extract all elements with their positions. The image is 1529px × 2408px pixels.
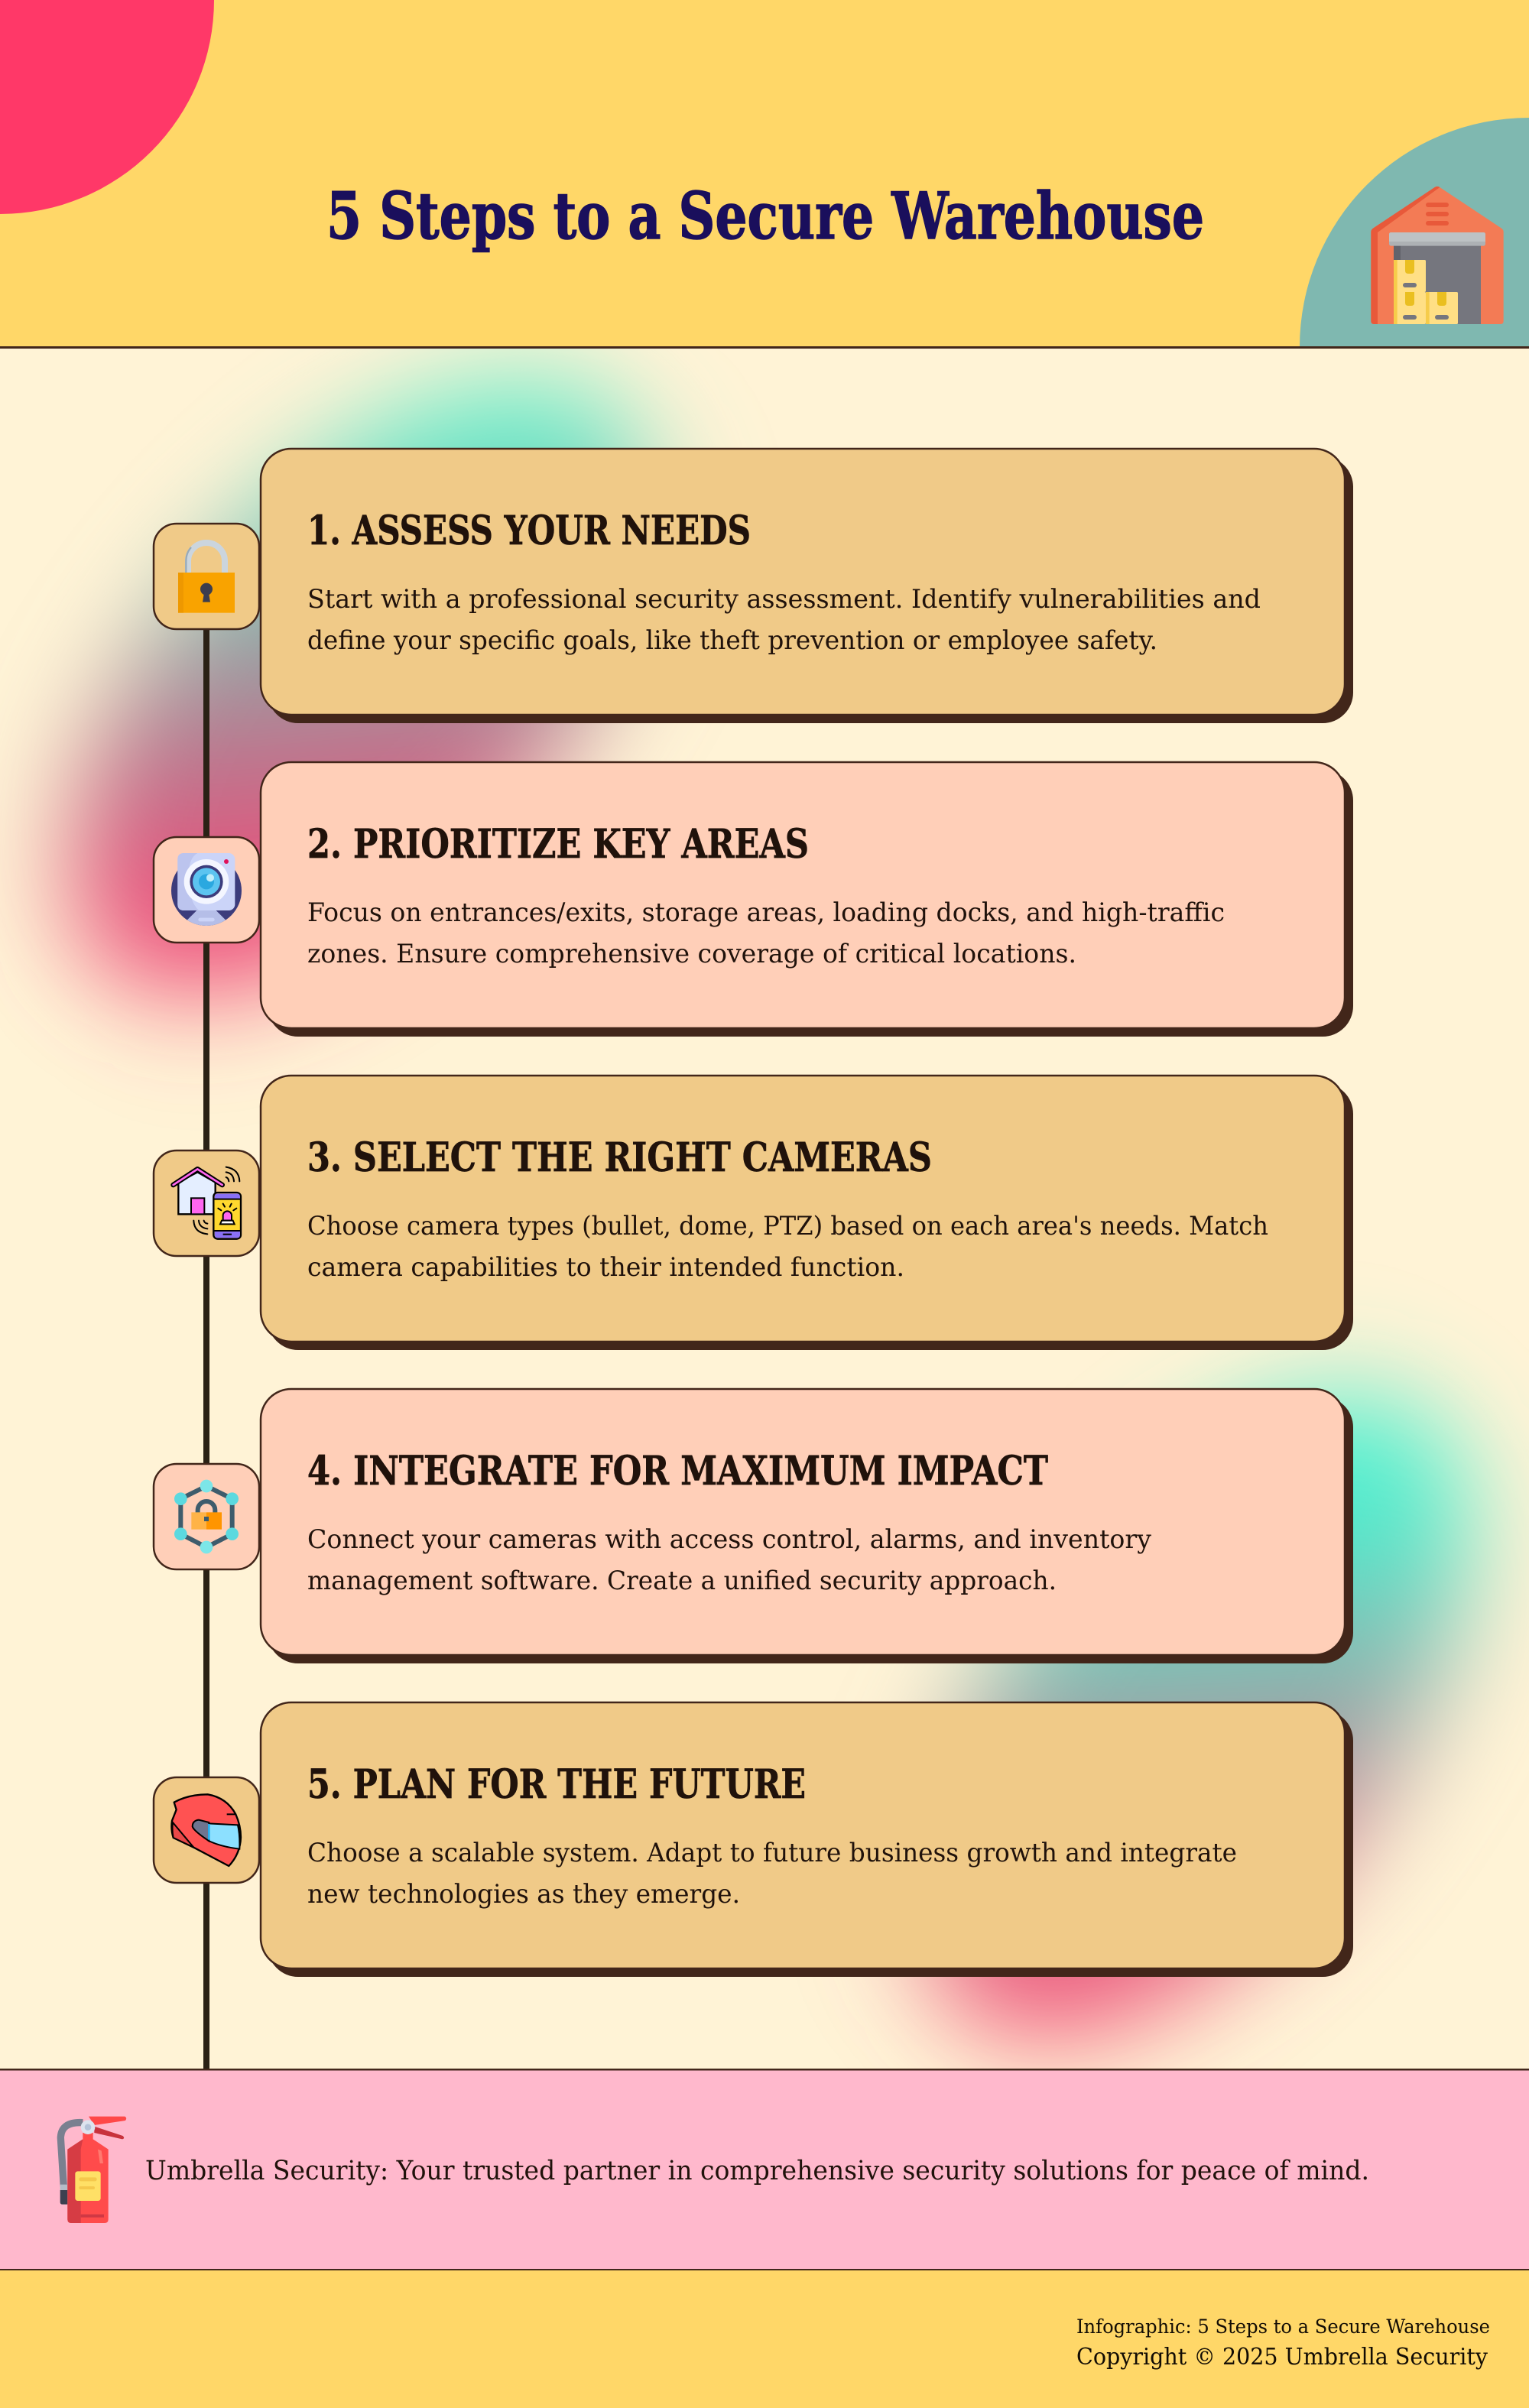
background blurred blobs — [0, 280, 1529, 2132]
card 1 shadow — [268, 456, 1353, 723]
icon box 4 — [154, 1464, 259, 1569]
icon: warehouse — [1371, 187, 1504, 324]
step 5 — [154, 1702, 1353, 1977]
icon: helmet — [171, 1794, 241, 1866]
body 2: Focus on entrances/exits, storage areas, loading docks, and high-traffic — [307, 897, 1225, 928]
icon: fire extinguisher — [60, 2117, 126, 2223]
body 2 — [307, 897, 1225, 969]
step 4 — [154, 1389, 1353, 1663]
body 1: Start with a professional security assessment. Identify vulnerabilities and — [307, 584, 1261, 615]
body 1: define your specific goals, like theft prevention or employee safety. — [307, 625, 1157, 656]
body 4 — [307, 1524, 1152, 1596]
step 2 — [154, 762, 1353, 1037]
card 5 panel — [261, 1702, 1345, 1968]
bottom banner — [0, 2069, 1529, 2270]
body 5 — [307, 1838, 1237, 1910]
card 2 panel — [261, 762, 1345, 1028]
step 1 — [154, 449, 1353, 723]
icon box 2 — [154, 837, 259, 943]
body 3: Choose camera types (bullet, dome, PTZ) based on each area's needs. Match — [307, 1211, 1268, 1241]
timeline line — [203, 629, 209, 2069]
footer line 2: Copyright © 2025 Umbrella Security — [1076, 2344, 1488, 2371]
heading 4: 4. INTEGRATE FOR MAXIMUM IMPACT — [307, 1448, 1048, 1494]
body 4: Connect your cameras with access control, alarms, and inventory — [307, 1524, 1152, 1555]
card 1 panel — [261, 449, 1345, 715]
card 4 panel — [261, 1389, 1345, 1655]
body 1 — [307, 584, 1261, 656]
body 5: Choose a scalable system. Adapt to future business growth and integrate — [307, 1838, 1237, 1868]
card 3 shadow — [268, 1083, 1353, 1350]
icon box 1 — [154, 524, 259, 629]
heading 5: 5. PLAN FOR THE FUTURE — [307, 1761, 806, 1808]
card 3 panel — [261, 1076, 1345, 1342]
decorative pink circle — [0, 0, 214, 214]
footer line 1: Infographic: 5 Steps to a Secure Warehouse — [1076, 2316, 1490, 2338]
body 5: new technologies as they emerge. — [307, 1879, 740, 1910]
icon: camera — [171, 853, 242, 927]
heading 1: 1. ASSESS YOUR NEEDS — [307, 508, 751, 554]
body 4: management software. Create a unified security approach. — [307, 1566, 1057, 1596]
footer band — [0, 2270, 1529, 2408]
header band — [0, 0, 1529, 349]
icon: network lock — [174, 1480, 239, 1553]
banner text: Umbrella Security: Your trusted partner in comprehensive security solutions for peace of mind. — [145, 2156, 1369, 2186]
decorative teal circle — [1300, 118, 1529, 347]
step 3 — [154, 1076, 1353, 1350]
title: 5 Steps to a Secure Warehouse — [326, 178, 1204, 254]
heading 3: 3. SELECT THE RIGHT CAMERAS — [307, 1134, 932, 1181]
icon box 5 — [154, 1777, 259, 1883]
body 3 — [307, 1211, 1268, 1283]
icon: smart home alarm — [174, 1167, 241, 1239]
card 2 shadow — [268, 770, 1353, 1037]
body 2: zones. Ensure comprehensive coverage of critical locations. — [307, 939, 1076, 969]
heading 2: 2. PRIORITIZE KEY AREAS — [307, 821, 809, 868]
icon: padlock — [178, 543, 235, 613]
body 3: camera capabilities to their intended function. — [307, 1252, 904, 1283]
icon box 3 — [154, 1150, 259, 1256]
card 4 shadow — [268, 1397, 1353, 1663]
card 5 shadow — [268, 1710, 1353, 1977]
